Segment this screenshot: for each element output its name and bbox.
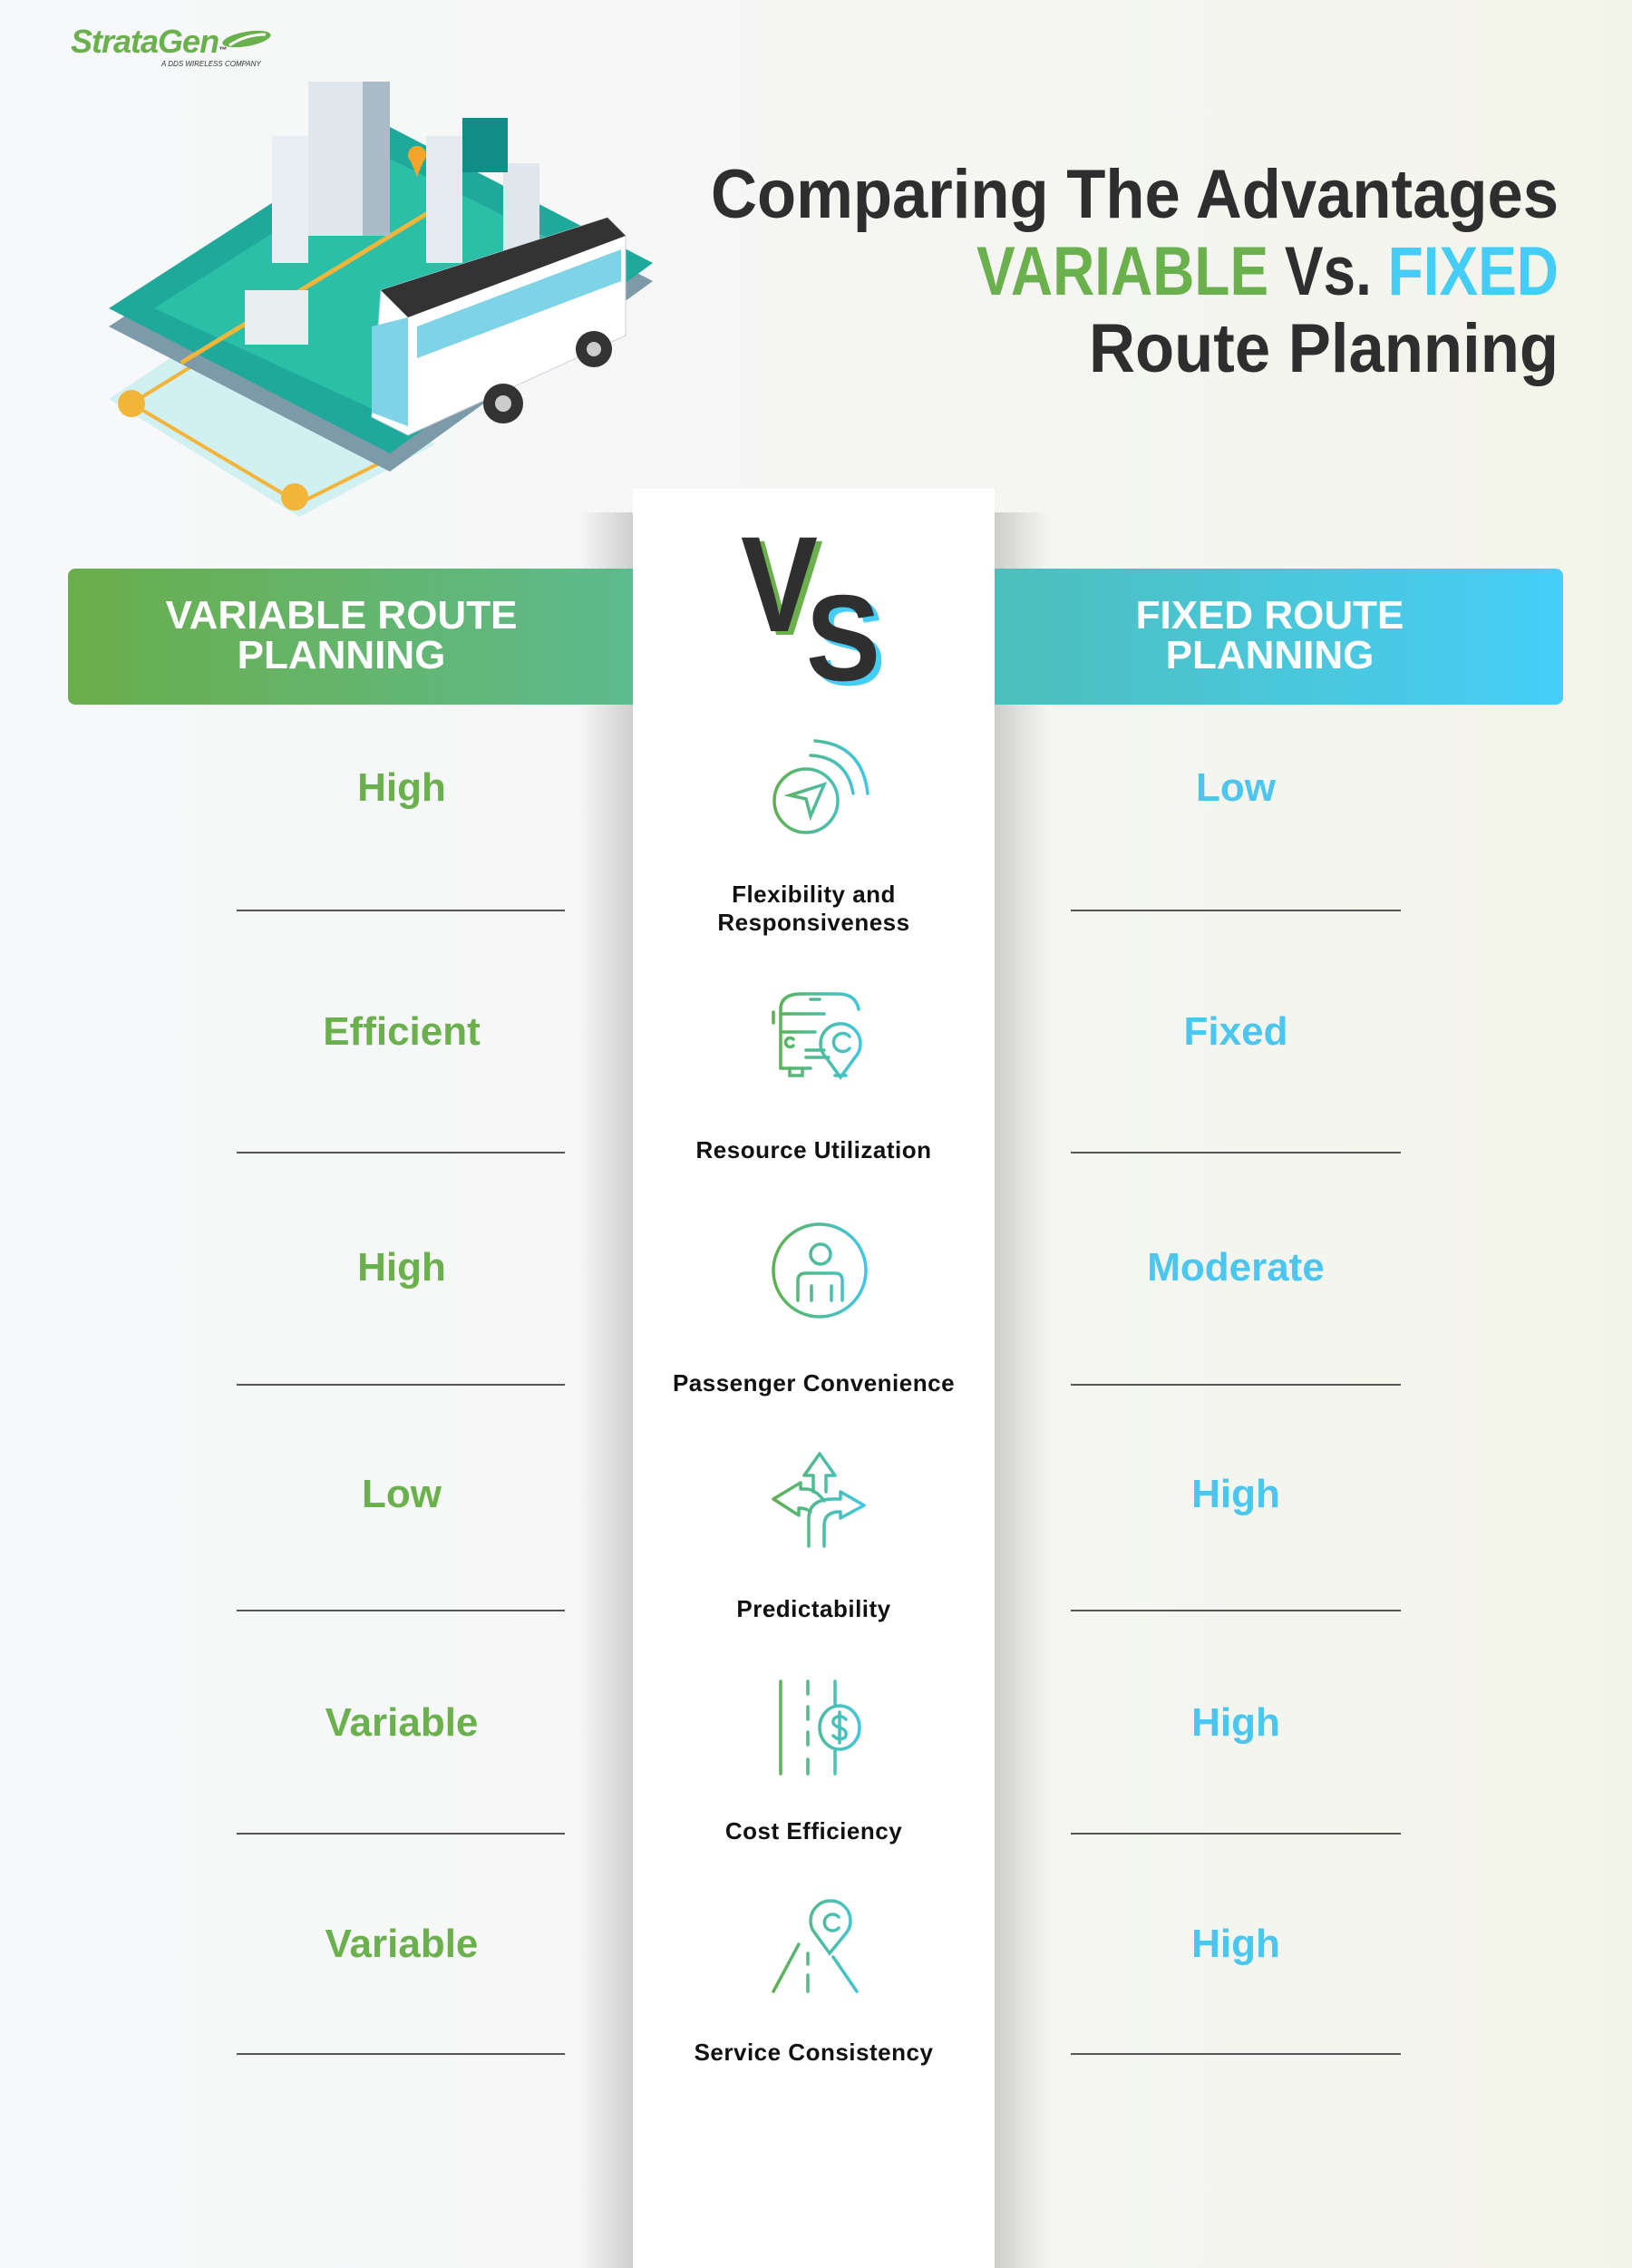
label: flexibility: Responsiveness — [717, 909, 910, 936]
right header: fixed route planning — [995, 569, 1563, 705]
left header: variable route planning: VARIABLE ROUTE — [166, 593, 517, 638]
text: Moderate — [1147, 1245, 1325, 1290]
left header: variable route planning — [68, 569, 633, 705]
label: flexibility — [717, 881, 910, 936]
icon: road with pin — [772, 1899, 859, 1993]
label: flexibility: Flexibility and — [732, 881, 896, 908]
center column — [633, 489, 995, 2268]
VS mark — [741, 526, 886, 694]
icon: person — [772, 1222, 868, 1319]
row values right: Low — [1196, 765, 1276, 810]
text: Variable — [325, 1700, 478, 1745]
label: passenger convenience: Passenger Convenience — [673, 1369, 955, 1397]
right header: fixed route planning: PLANNING — [1166, 633, 1374, 677]
text: High — [357, 1245, 446, 1290]
title — [711, 156, 1559, 387]
label: cost efficiency: Cost Efficiency — [725, 1817, 902, 1845]
logo: A DDS WIRELESS COMPANY — [161, 60, 261, 68]
label: predictability: Predictability — [736, 1595, 891, 1622]
text: High — [1191, 1922, 1280, 1966]
text: High — [1191, 1700, 1280, 1745]
text: Fixed — [1184, 1009, 1287, 1054]
icon: road with dollar — [779, 1679, 861, 1776]
logo: StrataGen™ — [71, 23, 226, 60]
right header: fixed route planning: FIXED ROUTE — [1136, 593, 1404, 638]
icon: bus with pin — [772, 992, 862, 1080]
text: High — [1191, 1472, 1280, 1516]
icon: arrows — [772, 1452, 866, 1548]
icon: navigation — [772, 739, 869, 834]
label: resource utilization: Resource Utilization — [696, 1136, 931, 1163]
label: service consistency: Service Consistency — [695, 2039, 933, 2066]
row values left: High — [357, 765, 446, 810]
text: Variable — [325, 1922, 478, 1966]
column shadows — [578, 512, 633, 2268]
left header: variable route planning: PLANNING — [238, 633, 445, 677]
illustration: city and bus — [109, 82, 653, 517]
text: Low — [362, 1472, 442, 1516]
logo — [71, 23, 271, 68]
text: Efficient — [323, 1009, 481, 1054]
